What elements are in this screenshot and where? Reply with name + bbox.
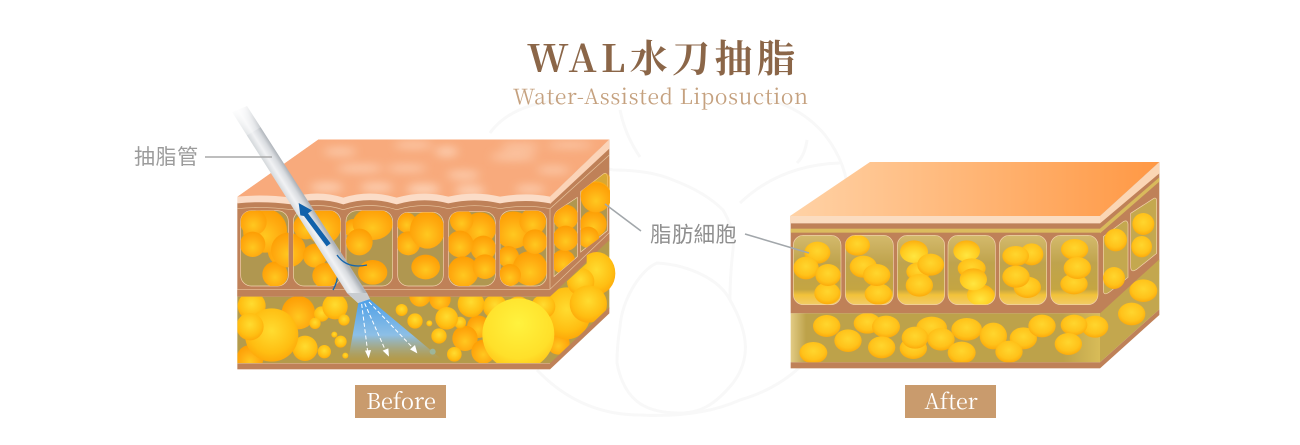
before badge: Before [366, 385, 436, 416]
after badge [905, 385, 996, 418]
right side skin band [550, 139, 609, 204]
skin block: after [790, 162, 1159, 368]
base front [791, 362, 1100, 368]
right side base [550, 307, 609, 369]
right side base [1100, 309, 1159, 368]
leader line: cannula [205, 156, 272, 158]
title: WAL水刀抽脂 [527, 28, 795, 83]
blue curve behind tube [332, 257, 338, 290]
right side yellow stripe [1100, 177, 1159, 233]
front fat cells [793, 198, 1157, 306]
side fat cells [1103, 198, 1157, 294]
yellow stripe [791, 229, 1100, 233]
dermis front face [237, 199, 550, 297]
label: cannula: 抽脂管 [134, 146, 198, 169]
background watermark: lotus outline [470, 98, 848, 415]
lower fat front [791, 313, 1100, 362]
right side fat layer [550, 239, 609, 365]
subtitle: Water-Assisted Liposuction [513, 81, 808, 111]
divider band under cells [237, 233, 609, 297]
leader line: before fat cell [605, 204, 641, 231]
leader line: after fat cell [745, 234, 809, 253]
skin block: before [230, 103, 615, 372]
right side fat layer [1100, 259, 1159, 362]
right side face: dermis [1100, 162, 1159, 315]
front fat cells [240, 173, 611, 288]
bottom shelf line [237, 362, 550, 364]
right side face: dermis [550, 139, 609, 298]
lower fat front [237, 297, 550, 363]
after badge: After [924, 385, 978, 416]
skin band [790, 216, 1100, 223]
thin dermis lines [237, 155, 609, 289]
skin top surface [237, 139, 609, 202]
water spray [348, 299, 442, 359]
dermis front [791, 223, 1100, 313]
cannula tube [230, 103, 370, 303]
right side skin band [1100, 162, 1159, 223]
blue flow arrows [299, 203, 367, 266]
skin top surface [790, 162, 1159, 216]
label: fat cells: 脂肪細胞 [650, 223, 737, 247]
subcutaneous fat globules [799, 279, 1157, 364]
base front [237, 363, 550, 369]
side fat cells [554, 173, 607, 277]
wavy skin band [237, 193, 550, 204]
subcutaneous fat globules [236, 252, 615, 372]
